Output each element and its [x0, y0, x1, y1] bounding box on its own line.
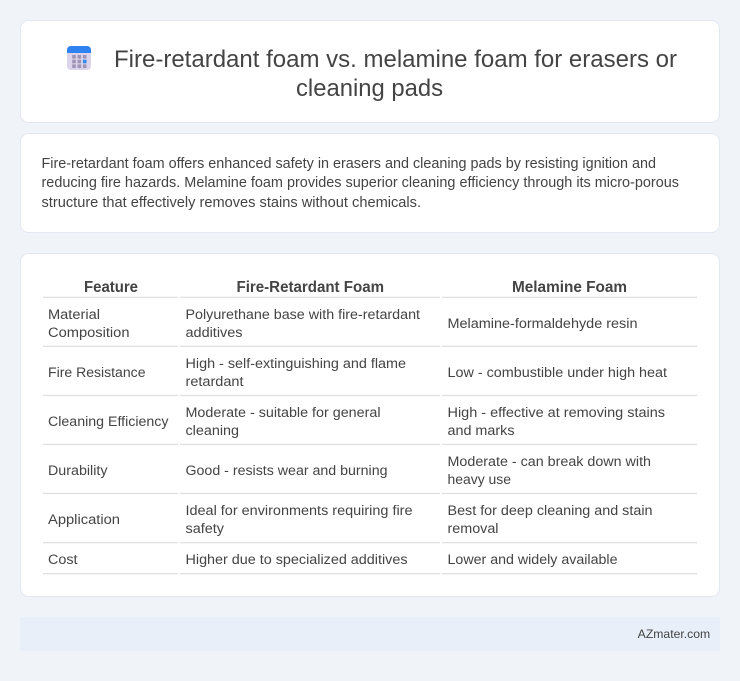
- row: cost: Higher due to specialized additives: [186, 552, 408, 568]
- title: [114, 46, 677, 102]
- icon: calendar: [67, 46, 91, 70]
- title: Fire-retardant foam vs. melamine foam for erasers or: [114, 46, 677, 73]
- row: cleaning efficiency: [43, 405, 697, 445]
- row: fire resistance: Fire Resistance: [48, 365, 146, 381]
- row: application: safety: [186, 521, 225, 537]
- row: application: removal: [448, 521, 498, 537]
- row: material composition: [43, 307, 697, 347]
- footer source text: AZmater.com: [638, 627, 710, 641]
- row: cleaning efficiency: High - effective at removing stains: [448, 405, 665, 421]
- row: application: Best for deep cleaning and stain: [448, 503, 652, 519]
- table header row: [43, 279, 697, 298]
- row: cleaning efficiency: cleaning: [186, 423, 239, 439]
- row: fire resistance: retardant: [186, 374, 244, 390]
- row: durability: heavy use: [448, 472, 511, 488]
- panel: summary: [20, 134, 720, 232]
- row: cost: [43, 552, 697, 574]
- panel: title card: [20, 20, 720, 122]
- footer bar: [20, 617, 720, 651]
- row: durability: Good - resists wear and burning: [186, 463, 388, 479]
- row: material composition: Composition: [48, 325, 130, 341]
- row: cost: Lower and widely available: [448, 552, 618, 568]
- table header row: Fire-Retardant Foam: [236, 279, 384, 296]
- row: material composition: additives: [186, 325, 242, 341]
- row: durability: [43, 454, 697, 494]
- row: durability: Durability: [48, 463, 108, 479]
- row: fire resistance: [43, 356, 697, 396]
- summary text: [42, 156, 679, 211]
- table header row: Melamine Foam: [512, 279, 627, 296]
- row: fire resistance: High - self-extinguishing and flame: [186, 356, 406, 372]
- row: material composition: Material: [48, 307, 100, 323]
- table header row: Feature: [84, 279, 138, 296]
- summary text: reducing fire hazards. Melamine foam provides superior cleaning efficiency through its micro-porous: [42, 175, 679, 191]
- row: cost: Cost: [48, 552, 78, 568]
- row: application: Ideal for environments requiring fire: [186, 503, 413, 519]
- row: application: [43, 503, 697, 543]
- row: cleaning efficiency: and marks: [448, 423, 514, 439]
- row: application: Application: [48, 512, 120, 528]
- summary text: structure that effectively removes stains without chemicals.: [42, 195, 421, 211]
- title: cleaning pads: [296, 75, 443, 102]
- summary text: Fire-retardant foam offers enhanced safety in erasers and cleaning pads by resisting ignition and: [42, 156, 656, 172]
- row: cleaning efficiency: Cleaning Efficiency: [48, 414, 169, 430]
- row: cleaning efficiency: Moderate - suitable for general: [186, 405, 380, 421]
- row: material composition: Melamine-formaldehyde resin: [448, 316, 638, 332]
- panel: comparison table: [20, 254, 720, 596]
- row: durability: Moderate - can break down with: [448, 454, 651, 470]
- row: material composition: Polyurethane base with fire-retardant: [186, 307, 420, 323]
- row: fire resistance: Low - combustible under high heat: [448, 365, 667, 381]
